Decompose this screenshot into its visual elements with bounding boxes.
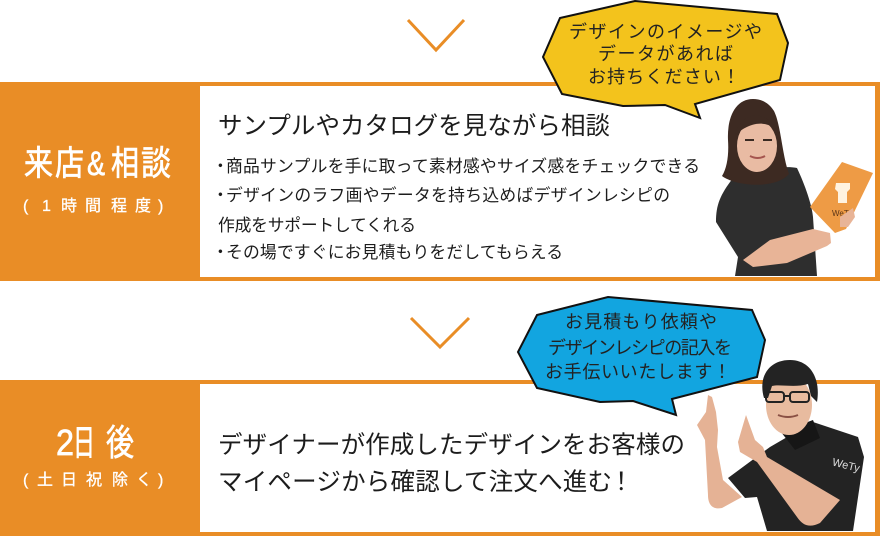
bullet list: その場ですぐにお見積もりをだしてもらえる xyxy=(226,243,563,262)
heading: two days later: 2 xyxy=(56,422,74,463)
panel: store visit and consultation xyxy=(0,82,880,281)
heading: visit and consultation: & xyxy=(87,145,105,183)
callout: blue speech bubble xyxy=(518,297,765,415)
callout: yellow speech bubble: デザインのイメージや xyxy=(569,22,762,42)
text: duration one hour: (1時間程度) xyxy=(23,197,163,215)
callout: blue speech bubble: お手伝いいたします！ xyxy=(545,362,731,382)
bullet list: ・ xyxy=(212,186,229,205)
callout: blue speech bubble: デザインレシピの記入を xyxy=(548,338,732,358)
text: confirm design and order: ！ xyxy=(609,469,634,496)
text: excluding weekends and holidays: (土日祝除く) xyxy=(23,471,163,489)
callout: yellow speech bubble: お持ちください！ xyxy=(588,67,740,87)
heading: visit and consultation: 相 xyxy=(111,145,139,183)
bullet list: ・ xyxy=(212,243,229,262)
bullet list: 作成をサポートしてくれる xyxy=(218,216,416,235)
photo: staff woman holding catalog xyxy=(716,99,873,276)
photo: staff woman holding catalog: WeTy xyxy=(832,209,852,218)
bullet list: ・ xyxy=(212,157,229,176)
bullet list: 商品サンプルを手に取って素材感やサイズ感をチェックできる xyxy=(226,157,700,176)
text: confirm design and order xyxy=(218,431,685,496)
heading: consult with samples: サンプルやカタログを見ながら相談 xyxy=(218,112,610,140)
heading: visit and consultation xyxy=(24,145,171,183)
callout: blue speech bubble: お見積もり依頼や xyxy=(565,312,717,332)
text: confirm design and order: デザイナーが作成したデザインをお客様の xyxy=(218,431,685,459)
photo: staff man pointing upward xyxy=(697,360,864,531)
heading: two days later: 後 xyxy=(106,422,134,463)
panel: design confirmation after two days xyxy=(0,380,880,536)
callout: yellow speech bubble: データがあれば xyxy=(598,44,733,64)
bullet list: デザインのラフ画やデータを持ち込めばデザインレシピの xyxy=(226,185,670,205)
photo: staff man pointing upward: WeTy xyxy=(831,457,861,475)
heading: visit and consultation: 来 xyxy=(24,145,53,183)
arrow: top chevron xyxy=(408,20,464,50)
heading: two days later xyxy=(56,422,134,463)
heading: visit and consultation: 店 xyxy=(55,145,84,183)
heading: visit and consultation: 談 xyxy=(141,145,171,183)
heading: two days later: 日 xyxy=(73,422,95,463)
bullet list xyxy=(212,157,700,262)
callout: yellow speech bubble xyxy=(543,1,788,118)
arrow: second chevron xyxy=(411,318,469,347)
text: confirm design and order: マイページから確認して注文へ進む xyxy=(218,468,612,496)
